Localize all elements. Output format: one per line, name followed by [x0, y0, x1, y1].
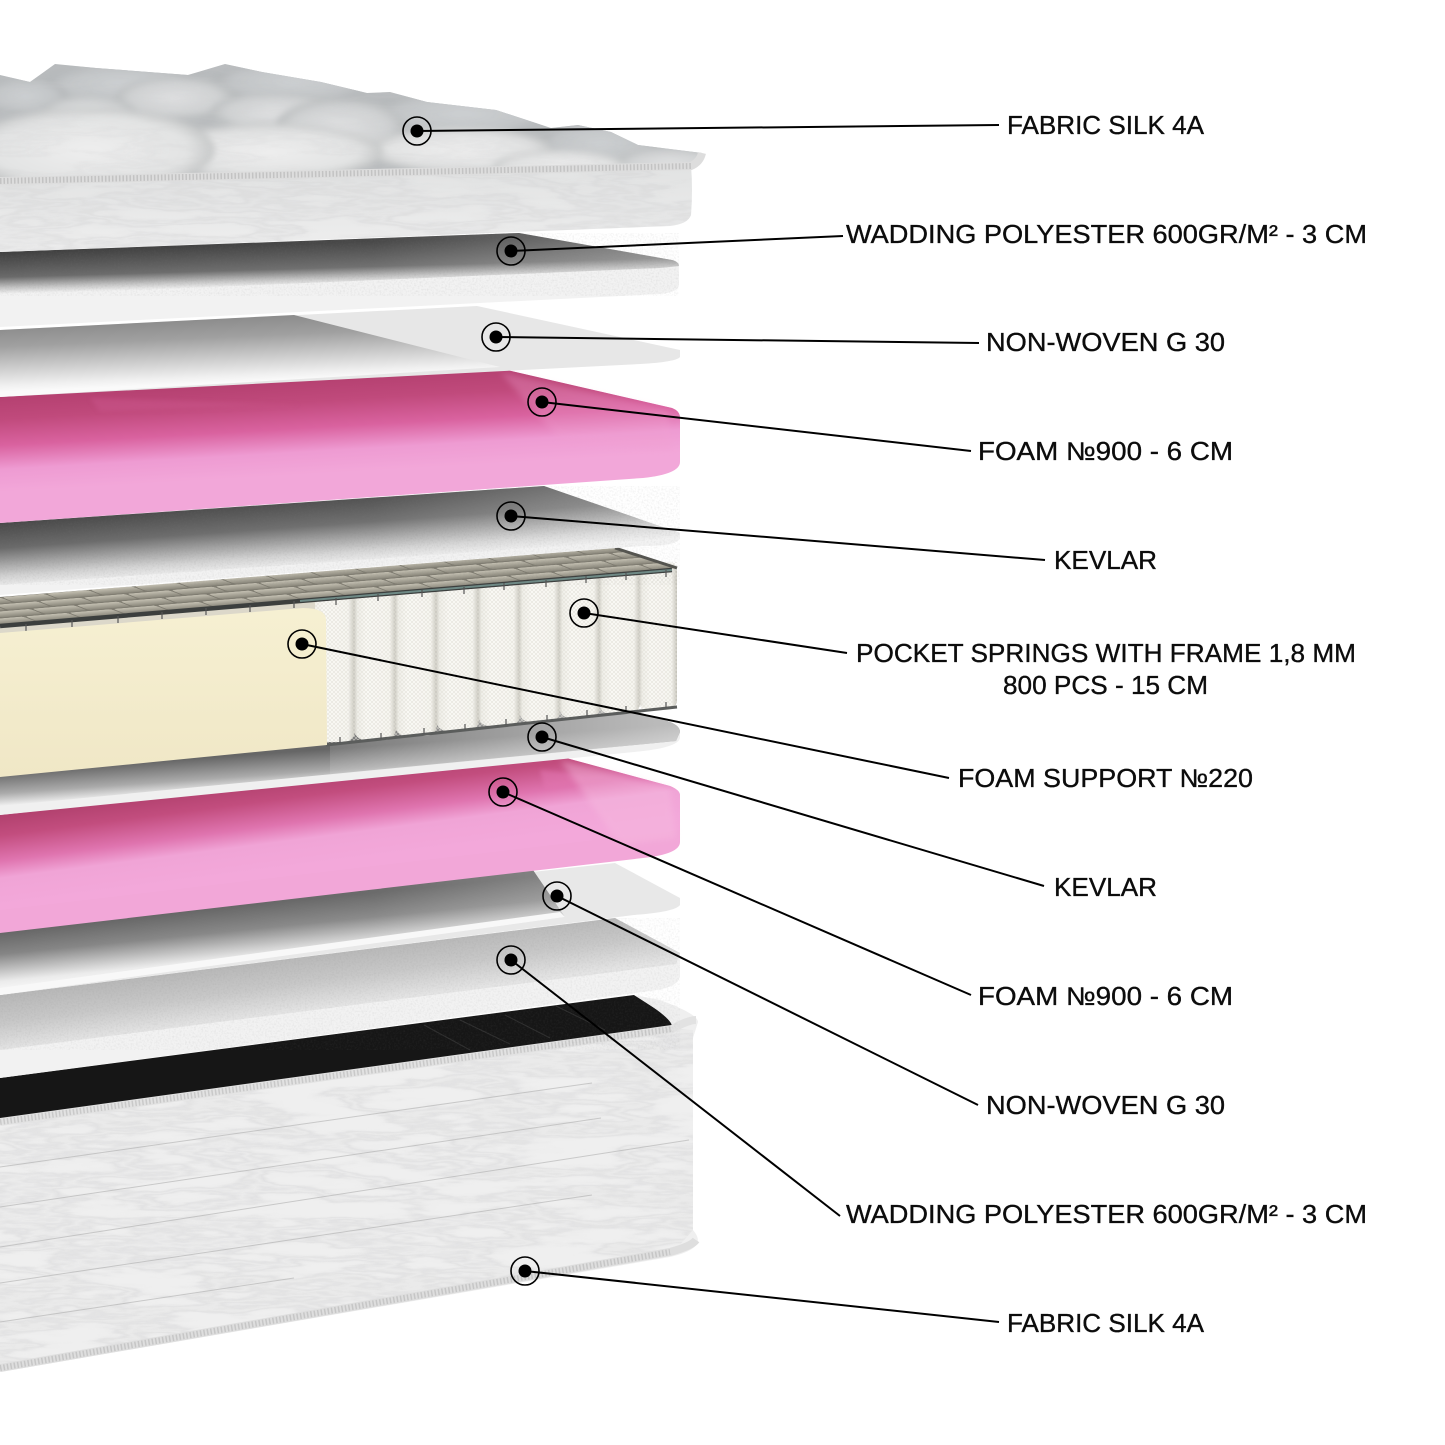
label: non-woven lower: NON-WOVEN G 30: [986, 1092, 1225, 1120]
top mattress side band: [0, 165, 692, 252]
leader: kevlar lower: [528, 723, 1044, 886]
label: kevlar upper: KEVLAR: [1054, 547, 1157, 575]
layer: wadding polyester bottom: [0, 918, 680, 1078]
label: wadding lower: WADDING POLYESTER 600GR/M² - 3 CM: [846, 1201, 1367, 1229]
layer: pocket springs with frame: [0, 548, 677, 746]
top mattress piping: [0, 153, 702, 181]
label: non-woven upper: NON-WOVEN G 30: [986, 329, 1225, 357]
label: pocket springs: [856, 640, 1356, 700]
bottom mattress body: [0, 995, 698, 1372]
leader: foam lower: [489, 778, 971, 995]
label: fabric silk bottom: FABRIC SILK 4A: [1007, 1310, 1204, 1338]
label: pocket springs: POCKET SPRINGS WITH FRAME 1,8 MM: [856, 640, 1356, 668]
label: wadding upper: WADDING POLYESTER 600GR/M² - 3 CM: [846, 221, 1367, 249]
upper wire frame: [0, 548, 677, 631]
layer: wadding polyester upper: [0, 233, 679, 327]
label: kevlar lower: KEVLAR: [1054, 874, 1157, 902]
bottom mattress bottom piping: [0, 1240, 696, 1368]
label: foam support: FOAM SUPPORT №220: [958, 765, 1253, 793]
label: foam lower: FOAM №900 - 6 CM: [978, 983, 1233, 1011]
layer: foam support 220: [0, 608, 327, 777]
layer: kevlar upper: [0, 486, 680, 595]
layer: non-woven bottom: [0, 863, 680, 995]
leader: foam support: [288, 630, 949, 778]
spring pockets: [310, 562, 677, 746]
leader: non-woven lower: [543, 882, 978, 1105]
leader: pocket springs: [570, 599, 847, 653]
leader: non-woven upper: [482, 323, 979, 351]
label: fabric silk top: FABRIC SILK 4A: [1007, 112, 1204, 140]
leader: wadding upper: [497, 236, 843, 265]
layer: foam 900 bottom: [0, 755, 680, 933]
leader lines and markers: [288, 117, 1045, 1322]
bottom mattress top piping: [0, 1020, 696, 1122]
label: pocket springs: 800 PCS - 15 CM: [1003, 672, 1208, 700]
layer: kevlar lower: [0, 700, 680, 815]
leader: foam upper: [528, 388, 971, 451]
quilted top surface: [0, 64, 702, 177]
label: foam upper: FOAM №900 - 6 CM: [978, 438, 1233, 466]
layer: bottom fabric silk mattress: [0, 995, 700, 1380]
lower wire frame: [326, 702, 677, 745]
layer: non-woven upper: [0, 306, 680, 397]
leader: kevlar upper: [497, 502, 1045, 560]
leader: wadding lower: [497, 946, 840, 1216]
spring tops: [0, 548, 677, 625]
leader: fabric silk top: [403, 117, 999, 145]
layer: foam 900 upper: [0, 368, 680, 523]
bottom mattress black interior: [0, 995, 676, 1122]
labels: [846, 112, 1367, 1338]
leader: fabric silk bottom: [511, 1257, 999, 1322]
spring strip under frame: [0, 601, 315, 638]
layer: top fabric silk mattress: [0, 60, 726, 260]
